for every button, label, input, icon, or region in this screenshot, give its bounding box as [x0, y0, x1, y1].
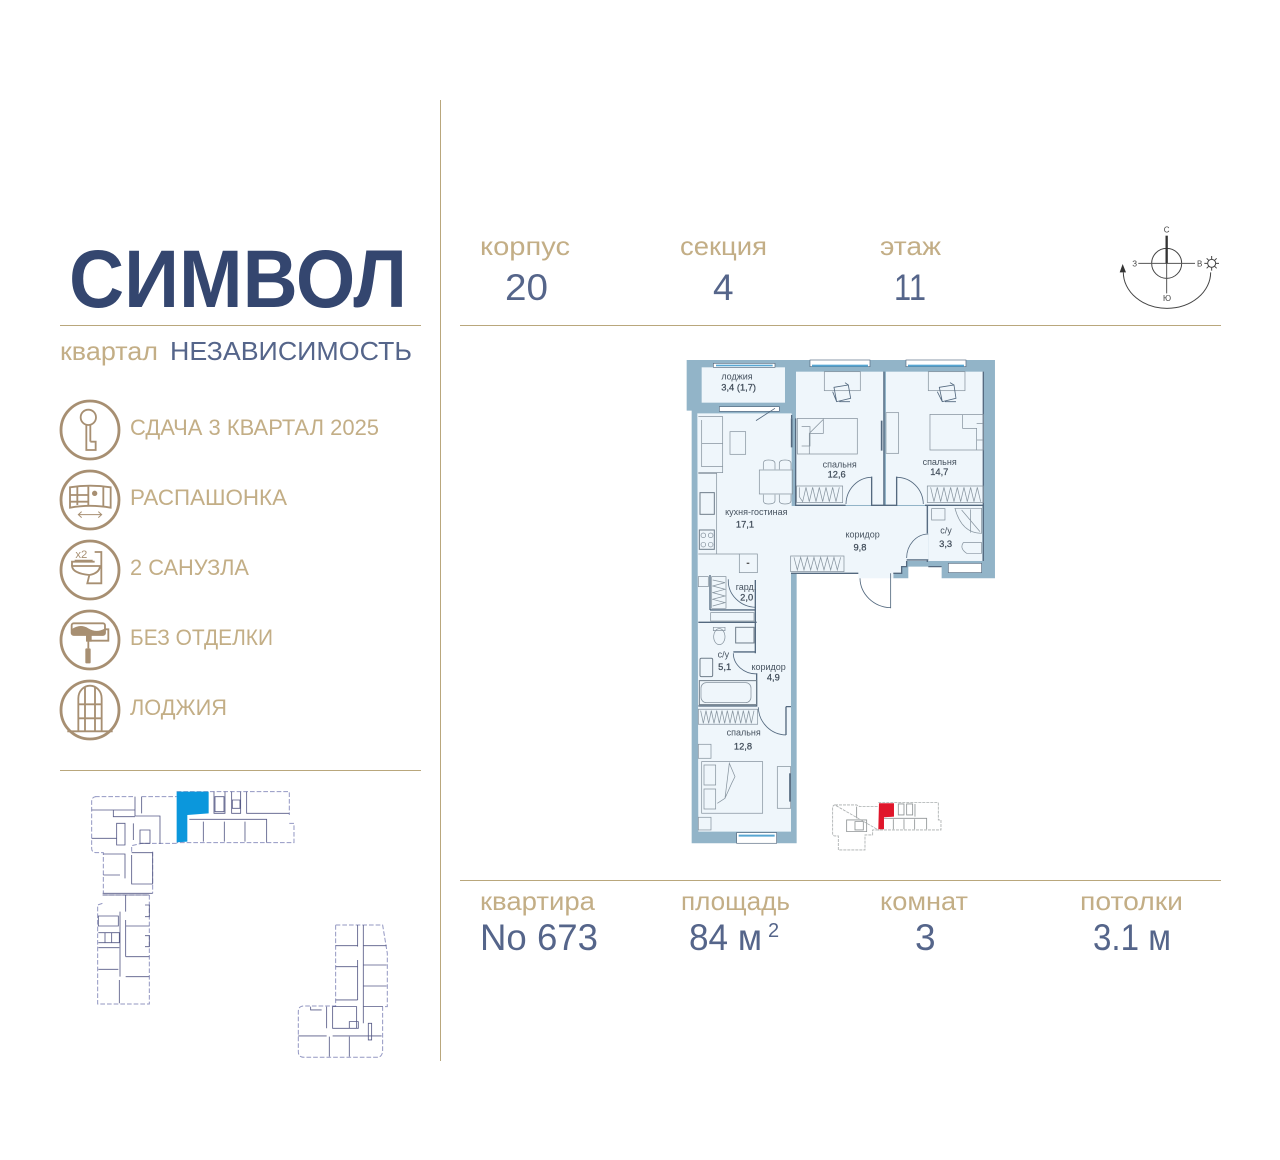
feature: two bathrooms	[61, 541, 249, 599]
feature: handover date	[61, 401, 379, 459]
icon: key	[61, 401, 119, 459]
subtitle: квартал НЕЗАВИСИМОСТЬ: НЕЗАВИСИМОСТЬ	[170, 336, 412, 366]
text: handover: СДАЧА 3 КВАРТАЛ 2025	[130, 415, 379, 440]
feature: loggia	[61, 681, 227, 739]
info: комнат	[880, 886, 968, 958]
label: лоджия	[721, 371, 756, 393]
label: спальня 14,7: 14,7	[930, 467, 948, 477]
room fills	[697, 367, 983, 832]
label: с/у 5,1: с/у	[718, 650, 730, 660]
label: коридор 9,8: коридор	[846, 529, 880, 539]
label: кухня-гостиная: кухня-гостиная	[725, 507, 788, 517]
info: секция 4	[680, 231, 767, 308]
key plan: building floor	[92, 792, 387, 1057]
label: с/у 3,3	[939, 525, 952, 549]
label: спальня 12,6: спальня	[823, 459, 857, 469]
compass: З	[1132, 259, 1137, 268]
outlines	[92, 792, 387, 1057]
label: с/у 3,3: 3,3	[939, 539, 952, 549]
label: спальня 12,6: 12,6	[828, 470, 846, 480]
wardrobes	[791, 486, 983, 572]
compass: С	[1164, 226, 1170, 235]
compass: В	[1197, 259, 1202, 268]
icon: layout	[61, 471, 119, 529]
label: спальня 12,8: спальня	[727, 728, 761, 738]
label: лоджия: 3,4 (1,7)	[721, 383, 756, 393]
label: спальня 14,7	[923, 457, 957, 477]
label: с/у 5,1: 5,1	[718, 662, 731, 672]
info: площадь: 2	[768, 920, 779, 942]
label: гард. 2,0	[736, 582, 756, 603]
info: потолки: 3.1 м	[1093, 917, 1171, 958]
label: спальня 14,7: спальня	[923, 457, 957, 467]
subtitle: квартал НЕЗАВИСИМОСТЬ	[60, 336, 412, 366]
label: кухня-гостиная	[725, 507, 788, 530]
highlighted apartment	[878, 803, 894, 829]
feature: through layout	[61, 471, 287, 529]
icon: toilet x2: x2	[75, 549, 87, 561]
text: no finish: БЕЗ ОТДЕЛКИ	[130, 625, 273, 650]
info: этаж 11: этаж	[880, 231, 942, 261]
text: layout: РАСПАШОНКА	[130, 485, 287, 510]
label: коридор 4,9: коридор	[752, 662, 786, 672]
windows	[713, 360, 966, 843]
furniture: upper rooms	[698, 372, 983, 573]
info: корпус 20: корпус	[480, 231, 570, 261]
icon: arched window	[61, 681, 119, 739]
white shaft	[948, 563, 982, 573]
label: коридор 9,8: 9,8	[853, 542, 866, 552]
subtitle: квартал НЕЗАВИСИМОСТЬ: квартал	[60, 336, 158, 366]
small key plan	[833, 803, 941, 850]
icon: toilet x2	[61, 541, 119, 599]
interior walls and doors	[756, 372, 983, 608]
label: с/у 3,3: с/у	[940, 525, 952, 535]
highlighted apartment	[177, 792, 209, 842]
info: корпус 20	[480, 231, 570, 308]
text: loggia: ЛОДЖИЯ	[130, 695, 227, 720]
header: building, section, floor	[480, 231, 942, 308]
logo: СИМВОЛ: СИМВОЛ	[69, 234, 407, 325]
floor plan	[687, 360, 995, 843]
info: площадь: площадь	[681, 886, 790, 916]
label: коридор 4,9	[752, 662, 786, 683]
info: секция 4: 4	[713, 267, 734, 308]
info: квартира: No 673	[480, 917, 598, 958]
info: площадь	[681, 886, 790, 958]
info: квартира	[480, 886, 598, 958]
label: спальня 12,6	[823, 459, 857, 480]
room labels	[718, 371, 957, 751]
label: лоджия: лоджия	[721, 371, 753, 381]
label: спальня 12,8: 12,8	[734, 741, 752, 751]
label: кухня-гостиная: 17,1	[736, 520, 754, 530]
text: bathrooms: 2 САНУЗЛА	[130, 555, 249, 580]
compass	[1120, 226, 1219, 308]
label: гард. 2,0: 2,0	[740, 593, 753, 603]
info: квартира: квартира	[480, 886, 596, 916]
feature: no finish	[61, 611, 273, 669]
feature list	[61, 401, 379, 739]
info: секция 4: секция	[680, 231, 767, 261]
label: коридор 9,8	[846, 529, 880, 552]
lower block	[698, 575, 791, 830]
label: с/у 5,1	[718, 650, 731, 672]
label: коридор 4,9: 4,9	[767, 673, 780, 683]
info: площадь: 84 м	[689, 917, 762, 958]
label: спальня 12,8	[727, 728, 761, 751]
info: этаж 11	[880, 231, 942, 308]
label: гард. 2,0: гард.	[736, 582, 756, 592]
info: этаж 11: 11	[894, 267, 926, 308]
compass: Ю	[1163, 294, 1171, 303]
walls	[687, 360, 995, 843]
footer: apartment data	[480, 886, 1183, 958]
info: корпус 20: 20	[505, 267, 548, 308]
info: комнат: комнат	[880, 886, 968, 916]
icon: paint roller	[61, 611, 119, 669]
info: потолки: потолки	[1080, 886, 1183, 916]
info: потолки	[1080, 886, 1183, 958]
info: комнат: 3	[915, 917, 936, 958]
